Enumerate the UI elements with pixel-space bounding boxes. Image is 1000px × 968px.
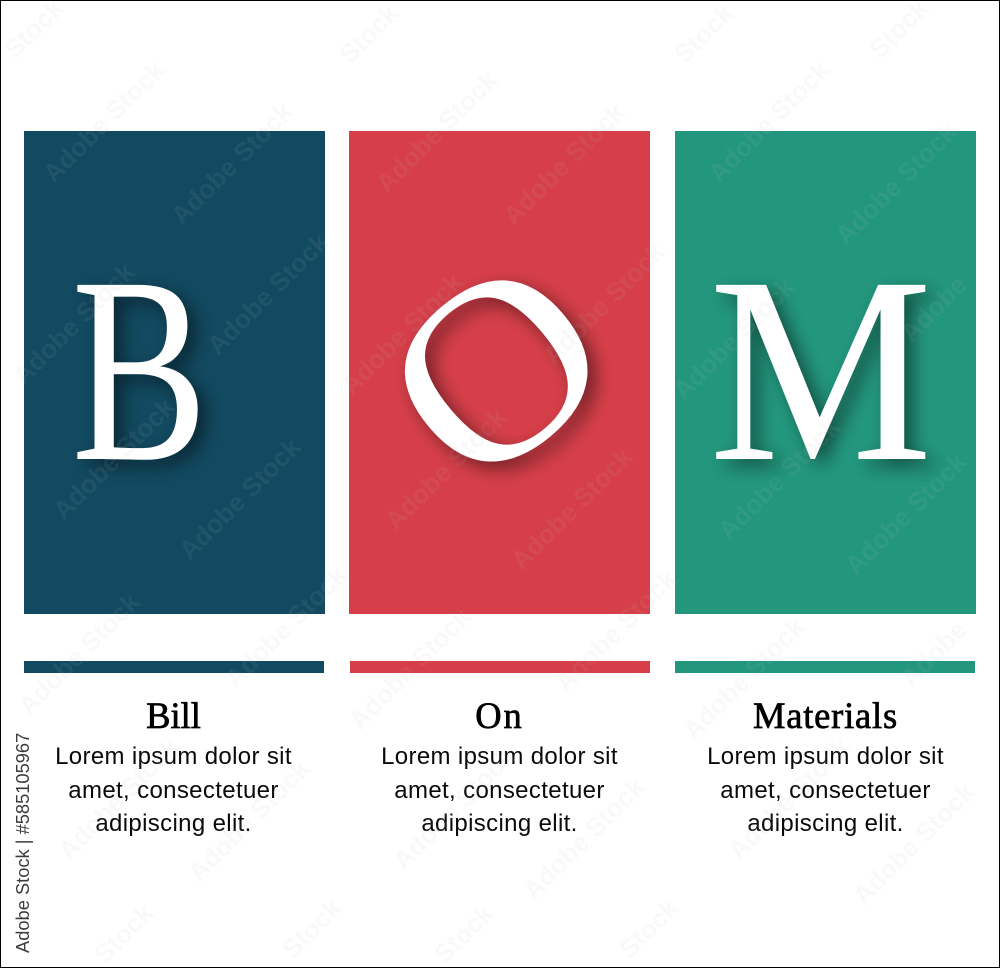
heading: Bill: Bill [146,695,201,736]
watermark overlay: Adobe Stock [370,64,504,198]
stock id text: Adobe Stock | #585105967 [12,733,33,953]
watermark overlay: Adobe Stock [505,441,639,575]
heading: Materials: Materials [753,695,898,736]
watermark overlay: Adobe Stock [12,586,146,720]
watermark overlay: Adobe Stock [52,731,186,865]
text column: Bill [55,695,292,837]
watermark overlay: Stock [668,0,740,69]
watermark overlay: Stock [88,898,160,968]
watermark overlay: Adobe Stock [839,446,973,580]
watermark overlay: Adobe [894,269,973,348]
description: Bill: Lorem ipsum dolor sit [55,743,292,770]
description: Bill: amet, consectetuer [68,776,279,804]
watermark overlay: Adobe Stock [335,266,469,400]
accent bar: Bill [24,661,324,673]
watermark overlay: Adobe Stock [667,271,801,405]
description: Materials: adipiscing elit. [747,810,904,837]
accent bar: Materials [675,661,975,673]
accent bar: On [350,661,650,673]
panel: B [24,131,325,614]
description: On: adipiscing elit. [421,810,578,837]
watermark overlay: Adobe Stock [343,601,477,735]
description: On: Lorem ipsum dolor sit [381,743,618,770]
watermark overlay: Adobe Stock [165,96,299,230]
watermark overlay: Adobe Stock [829,116,963,250]
watermark overlay: Adobe Stock [677,611,811,745]
watermark overlay: Stock [333,0,405,69]
letter: M: M [709,222,933,517]
description: Materials: amet, consectetuer [720,776,931,804]
watermark overlay: Adobe Stock [379,401,513,535]
watermark overlay: Adobe Stock [702,54,836,188]
description: Bill: adipiscing elit. [95,810,252,837]
watermark overlay: Stock [276,893,348,964]
description: Bill [55,743,292,837]
watermark overlay: Adobe Stock [387,741,521,875]
watermark overlay: Adobe Stock [517,771,651,905]
description: Materials [707,743,944,837]
text column: Materials [707,695,944,837]
text column: On [381,695,618,837]
watermark overlay: Adobe Stock [722,731,856,865]
watermark overlay: Adobe Stock [712,411,846,545]
watermark overlay: Stock [428,898,500,968]
watermark overlay: Adobe Stock [37,54,171,188]
watermark overlay: Adobe Stock [173,431,307,565]
watermark overlay: Adobe Stock [47,391,181,525]
watermark overlay: Adobe Stock [201,226,335,360]
watermark overlay: Adobe Stock [219,559,353,693]
watermark overlay: Adobe Stock [182,753,316,887]
panel: M [675,131,976,614]
watermark overlay: Stock [613,893,685,964]
watermark overlay: Adobe [894,614,973,693]
description: On: amet, consectetuer [394,776,605,804]
description: On [381,743,618,837]
letter: B: B [72,223,208,517]
heading: On: On [475,695,524,736]
watermark overlay: Adobe Stock [537,236,671,370]
watermark overlay: Adobe Stock [497,96,631,230]
watermark overlay: Adobe Stock [549,563,683,697]
description: Materials: Lorem ipsum dolor sit [707,743,944,770]
panel: O [349,131,650,614]
watermark overlay: Adobe Stock [7,256,141,390]
watermark overlay: Adobe Stock [847,776,981,910]
